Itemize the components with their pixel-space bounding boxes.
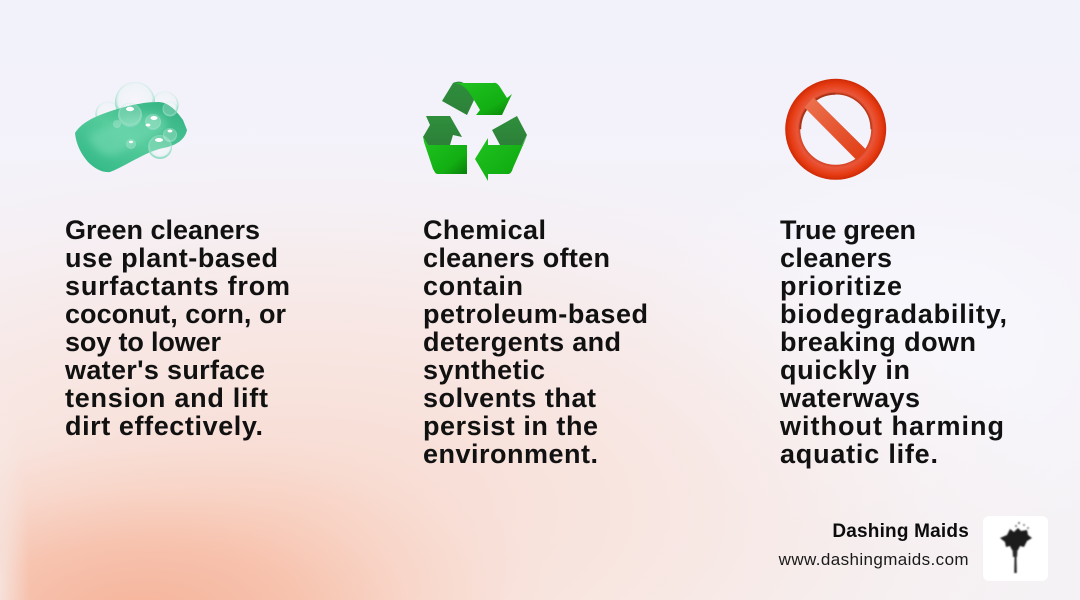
- text block: biodegradability: waterways: [780, 382, 920, 412]
- text block: biodegradability: [780, 214, 1007, 468]
- text block: plant-based surfactants: coconut, corn, or: [65, 298, 286, 328]
- website address: www.dashingmaids.com: [779, 550, 969, 569]
- text block: chemical cleaners: [423, 214, 648, 468]
- text block: biodegradability: aquatic life.: [780, 438, 938, 468]
- text block: biodegradability: True green: [780, 214, 916, 244]
- text block: chemical cleaners: Chemical: [423, 214, 546, 244]
- text block: chemical cleaners: cleaners often: [423, 242, 610, 272]
- text block: biodegradability: breaking down: [780, 326, 976, 356]
- text block: chemical cleaners: synthetic: [423, 354, 545, 384]
- text block: biodegradability: cleaners: [780, 242, 892, 272]
- text block: plant-based surfactants: [65, 214, 290, 440]
- text block: chemical cleaners: environment.: [423, 438, 598, 468]
- text block: plant-based surfactants: water's surface: [65, 354, 265, 384]
- text block: chemical cleaners: solvents that: [423, 382, 596, 412]
- text block: chemical cleaners: petroleum-based: [423, 298, 648, 328]
- text block: chemical cleaners: contain: [423, 270, 523, 300]
- text block: plant-based surfactants: dirt effectively.: [65, 410, 263, 440]
- icon: recycling symbol: [423, 82, 527, 181]
- text block: plant-based surfactants: tension and lift: [65, 382, 268, 412]
- text block: biodegradability: biodegradability,: [780, 298, 1007, 328]
- text block: biodegradability: prioritize: [780, 270, 902, 300]
- text block: chemical cleaners: detergents and: [423, 326, 621, 356]
- icon: prohibition sign: [785, 78, 886, 180]
- brand name: Dashing Maids: [832, 521, 969, 542]
- text block: plant-based surfactants: Green cleaners: [65, 214, 260, 244]
- text block: biodegradability: quickly in: [780, 354, 910, 384]
- text block: biodegradability: without harming: [780, 410, 1004, 440]
- text block: plant-based surfactants: soy to lower: [65, 326, 221, 356]
- text block: plant-based surfactants: surfactants from: [65, 270, 290, 300]
- icon: green soap bar with bubbles: [75, 82, 187, 172]
- text block: chemical cleaners: persist in the: [423, 410, 598, 440]
- logo: feather duster: [983, 516, 1048, 581]
- text block: plant-based surfactants: use plant-based: [65, 242, 278, 272]
